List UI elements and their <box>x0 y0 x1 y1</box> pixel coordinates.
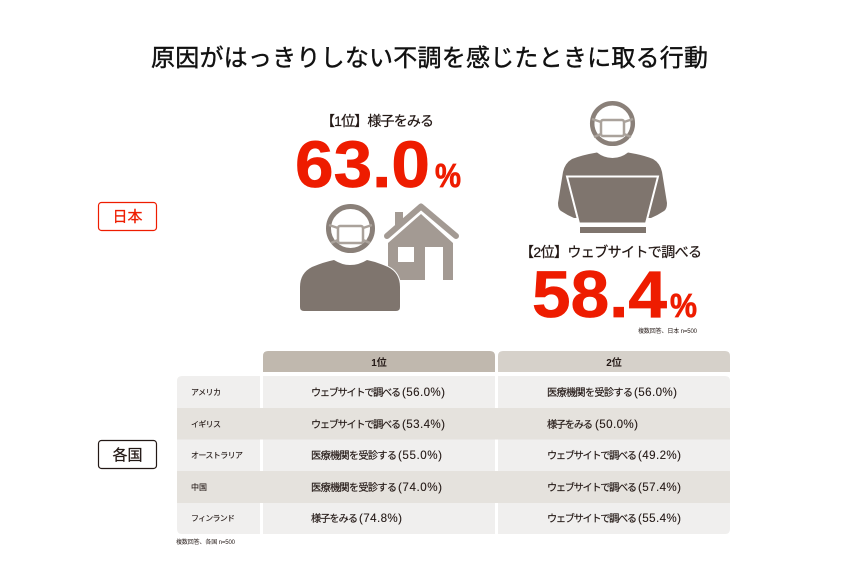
title: 原因がはっきりしない不調を感じたときに取る行動 <box>151 45 708 72</box>
header: rank 1 <box>263 351 495 372</box>
icon: person with mask using laptop <box>558 103 667 233</box>
icon: house <box>387 206 456 280</box>
row: Australia: ウェブサイトで調べる <box>547 449 637 462</box>
row: Finland: (74.8%) <box>359 512 402 525</box>
row: Finland: ウェブサイトで調べる <box>547 512 637 525</box>
row: USA <box>177 376 730 408</box>
row: Finland <box>177 503 730 534</box>
row: Australia: 医療機関を受診する <box>311 449 397 462</box>
row: UK: (53.4%) <box>402 418 445 431</box>
row: China: (57.4%) <box>638 481 681 494</box>
icon: person <box>300 206 400 311</box>
note: Japan sample: 複数回答、日本 n=500 <box>638 327 698 335</box>
row: China: ウェブサイトで調べる <box>547 481 637 494</box>
row: USA: (56.0%) <box>402 386 445 399</box>
row: Australia: (49.2%) <box>638 449 681 462</box>
label: Japan: 日本 <box>112 208 143 226</box>
row: China <box>177 471 730 503</box>
rank 1 value: 63.0 <box>295 127 430 201</box>
row: USA: ウェブサイトで調べる <box>311 386 401 399</box>
row: USA: (56.0%) <box>634 386 677 399</box>
label: Japan <box>98 202 156 230</box>
row: Finland: フィンランド <box>191 514 235 523</box>
row: Australia: オーストラリア <box>191 451 243 460</box>
row: UK: (50.0%) <box>595 418 638 431</box>
row: UK: ウェブサイトで調べる <box>311 418 401 431</box>
rank 1 heading: 【1位】様子をみる <box>321 113 434 129</box>
rank 2 heading: 【2位】ウェブサイトで調べる <box>520 244 702 260</box>
rank 2 value: % <box>670 287 697 324</box>
row: China: 中国 <box>191 482 207 492</box>
label: countries: 各国 <box>112 447 143 464</box>
row: UK <box>177 408 730 440</box>
row: Finland: (55.4%) <box>638 512 681 525</box>
table: top two actions by country <box>177 351 730 534</box>
rank 2 value: 58.4 <box>532 257 667 331</box>
row: China: 医療機関を受診する <box>311 481 397 494</box>
header: rank 2: 2位 <box>606 356 622 369</box>
row: Australia <box>177 440 730 471</box>
row: Australia: (55.0%) <box>398 449 442 462</box>
label: countries <box>98 440 156 468</box>
header: rank 2 <box>498 351 730 372</box>
row: USA: 医療機関を受診する <box>547 386 633 399</box>
row: UK: 様子をみる <box>547 418 593 431</box>
header: rank 1: 1位 <box>371 356 387 369</box>
row: China: (74.0%) <box>398 481 442 494</box>
row: USA: アメリカ <box>191 388 221 397</box>
row: Finland: 様子をみる <box>311 512 358 525</box>
note: countries sample: 複数回答、各国 n=500 <box>176 538 236 546</box>
row: UK: イギリス <box>191 420 221 429</box>
rank 1 value: % <box>435 157 461 194</box>
icon: person with mask and house <box>300 206 456 311</box>
